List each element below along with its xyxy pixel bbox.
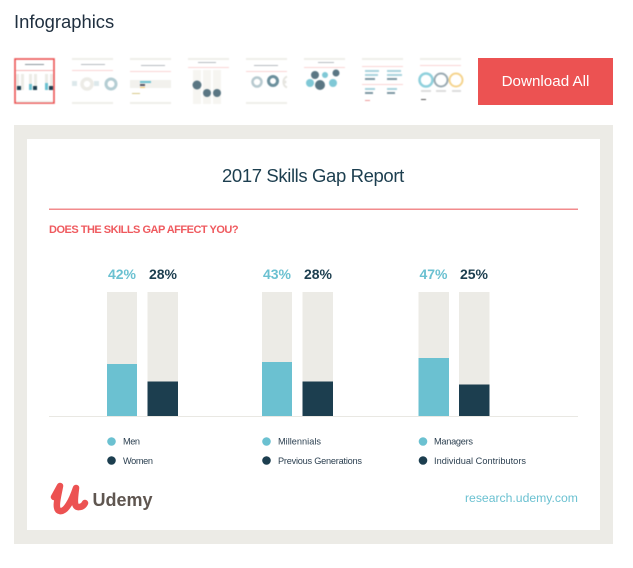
bar pair: millennials vs previous generations	[262, 266, 333, 416]
section heading: DOES THE SKILLS GAP AFFECT YOU?	[49, 224, 238, 236]
chart legends: Individual Contributors	[434, 456, 526, 466]
website link: research.udemy.com	[465, 491, 578, 505]
bar pair: managers vs individual contributors	[418, 266, 490, 416]
report panel	[14, 125, 613, 544]
thumbnail 4	[188, 58, 229, 104]
report title: 2017 Skills Gap Report	[222, 165, 404, 186]
chart legends: Previous Generations	[278, 456, 362, 466]
bar pair: managers vs individual contributors: 25%	[460, 266, 489, 282]
chart legends: Millennials	[278, 436, 321, 446]
bar pair: millennials vs previous generations: 28%	[304, 266, 333, 282]
bar pair: men vs women	[107, 266, 178, 416]
bar pair: millennials vs previous generations: 43%	[263, 266, 292, 282]
download all button	[478, 58, 613, 105]
heading: Infographics: Infographics	[14, 11, 114, 32]
chart legends: Women	[123, 456, 153, 466]
thumbnail 3	[130, 58, 171, 104]
thumbnail strip	[13, 57, 464, 105]
thumbnail 8	[420, 58, 462, 100]
thumbnail 7	[362, 58, 403, 101]
bar pair: men vs women: 28%	[149, 266, 178, 282]
thumbnail 1 selected	[15, 59, 54, 103]
bar pair: managers vs individual contributors: 47%	[419, 266, 448, 282]
chart legends: Men	[123, 436, 140, 446]
thumbnail 5	[246, 58, 287, 104]
thumbnail 2	[72, 58, 116, 104]
download all button: Download All	[502, 73, 589, 90]
bar pair: men vs women: 42%	[108, 266, 137, 282]
thumbnail 6	[304, 58, 345, 90]
udemy logo: Udemy	[92, 490, 153, 510]
chart legends: Managers	[434, 436, 473, 446]
